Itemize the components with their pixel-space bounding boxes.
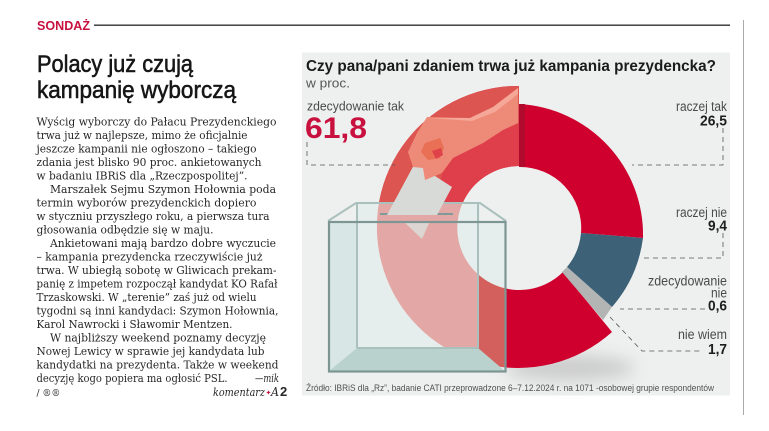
chart title: Czy pana/pani zdaniem trwa już kampania prezydencka? [306, 58, 716, 75]
slice: raczej nie [567, 233, 643, 307]
article text: / ®® [36, 389, 60, 399]
article text: —mik [255, 371, 279, 385]
ballot [387, 163, 452, 215]
label: zdecydowanie tak: 61,8 [305, 112, 367, 145]
article text: 2 [280, 384, 287, 399]
headline: Polacy już czują [37, 51, 194, 78]
label: nie wiem: nie wiem [678, 327, 727, 342]
box edges [328, 203, 506, 348]
ballot box [328, 202, 507, 373]
slice: zdecydowanie tak [377, 86, 612, 368]
label: zdecydowanie tak: zdecydowanie tak [307, 99, 404, 114]
slice: zdecydowanie nie [562, 267, 612, 320]
article text: głosowania odbędzie się w maju. [36, 222, 214, 236]
article text: zdania jest blisko 90 proc. ankietowanych [36, 155, 262, 169]
headline: kampanię wyborczą [37, 77, 237, 104]
label: raczej nie [640, 205, 727, 258]
slice: raczej tak [519, 104, 643, 238]
label: raczej nie: 9,4 [708, 219, 727, 235]
box floor [328, 348, 506, 372]
article text: Trzaskowski. W „terenie” zaś już od wielu [36, 290, 256, 304]
source note: Źródło: IBRiS dla „Rz”, badanie CATI przeprowadzone 6–7.12.2024 r. na 1071 -osobowej grupie respondentów [306, 383, 714, 393]
label: raczej tak [632, 99, 727, 165]
article text [35, 114, 287, 399]
article text: W najbliższy weekend poznamy decyzję [50, 330, 266, 344]
label: zdecydowanie nie: nie [711, 286, 727, 300]
article text: komentarz [213, 385, 266, 399]
article text: termin wyborów prezydenckich dopiero [36, 196, 257, 210]
panel: chart [302, 52, 730, 396]
article text: tygodni są inni kandydaci: Szymon Hołownia, [36, 304, 278, 318]
article text: panię z impetem rozpoczął kandydat KO Rafał [36, 276, 278, 290]
article text: trwa już w najlepsze, mimo że oficjalnie [36, 128, 248, 142]
article text: ✦ [266, 389, 272, 397]
label: raczej tak: 26,5 [700, 114, 727, 130]
article text: Wyścig wyborczy do Pałacu Prezydenckiego [36, 114, 277, 128]
article text: Nowej Lewicy w sprawie jej kandydata lub [36, 344, 264, 358]
label: zdecydowanie nie [620, 274, 727, 315]
article text: trwa. W ubiegłą sobotę w Gliwicach prekam- [36, 263, 277, 277]
label: nie wiem: 1,7 [708, 342, 727, 358]
donut chart [377, 86, 643, 368]
label: zdecydowanie nie: 0,6 [708, 299, 727, 315]
article text: Ankietowani mają bardzo dobre wyczucie [49, 236, 276, 250]
article text: – kampania prezydencka rzeczywiście już [36, 250, 262, 264]
label: nie wiem [610, 317, 727, 358]
interior tint over slice [328, 221, 506, 372]
label: raczej tak: raczej tak [676, 99, 727, 114]
label: zdecydowanie tak [305, 99, 404, 165]
unit note: w proc. [305, 76, 350, 90]
label: zdecydowanie nie: zdecydowanie [648, 274, 727, 289]
article text: w styczniu przyszłego roku, a pierwsza tura [36, 209, 270, 223]
label: raczej nie: raczej nie [676, 205, 727, 220]
article text: jeszcze kampanii nie ogłoszono – takiego [35, 142, 257, 156]
article text: kandydatki na prezydenta. Także w weekend [36, 358, 279, 372]
article text: Marszałek Sejmu Szymon Hołownia poda [50, 182, 276, 196]
article text: decyzję kogo popiera ma ogłosić PSL. [36, 371, 228, 385]
donut shadow [505, 355, 635, 381]
hand [408, 88, 518, 180]
ballot inside [403, 221, 430, 239]
icon: hand with ballot [387, 88, 518, 215]
article text: Karol Nawrocki i Sławomir Mentzen. [36, 317, 232, 331]
section label: SONDAŻ [37, 18, 90, 33]
headline [37, 51, 237, 104]
article text: w badaniu IBRiS dla „Rzeczpospolitej”. [36, 168, 248, 182]
article text: A [270, 385, 279, 399]
